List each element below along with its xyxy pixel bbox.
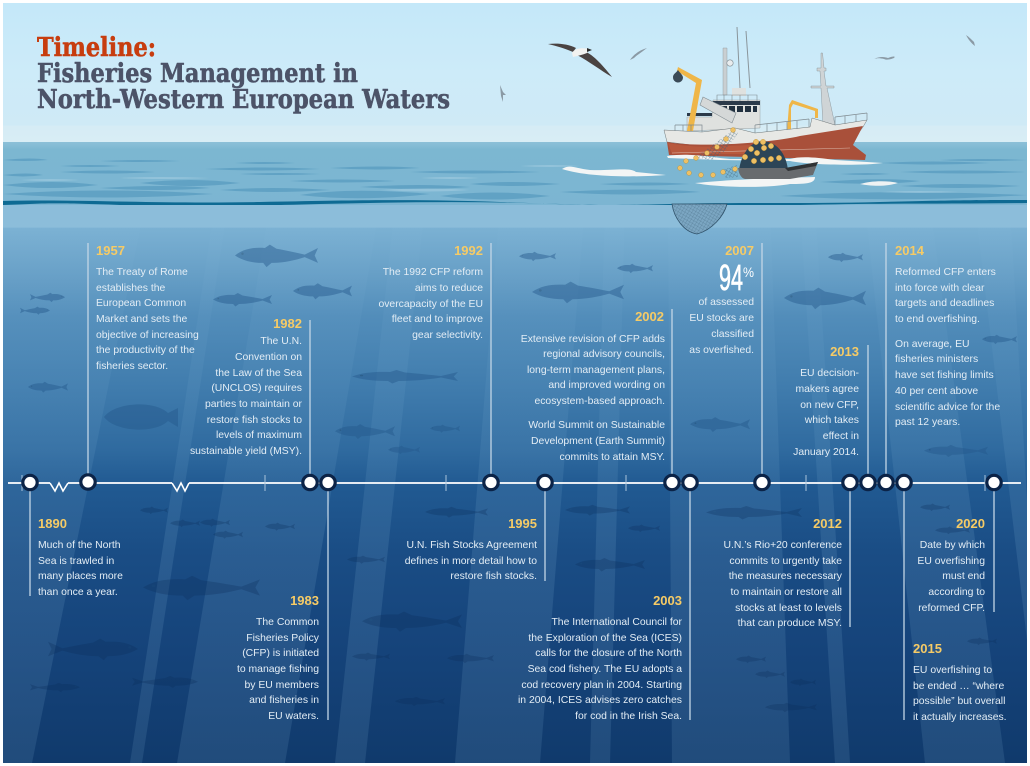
event 2002: World Summit on Sustainable [528, 420, 665, 431]
event 2003: calls for the closure of the North [535, 648, 682, 659]
event 2003: for cod in the Irish Sea. [575, 711, 682, 722]
event 2012: that can produce MSY. [738, 618, 842, 629]
event 2020: 2020 [956, 516, 985, 531]
event 2020: according to [928, 587, 985, 598]
event 2007: classified [711, 329, 754, 340]
wheelhouse [687, 100, 760, 131]
title: line 2: Fisheries Management in [37, 59, 358, 89]
event 2015: be ended … “where [913, 681, 1004, 692]
timeline markers [23, 475, 1001, 490]
event 2013: January 2014. [793, 447, 859, 458]
event 2003: The International Council for [551, 617, 683, 628]
event 1992: fleet and to improve [392, 314, 483, 325]
event 1890 [30, 481, 123, 598]
event 1995: restore fish stocks. [450, 571, 537, 582]
radar dome [727, 60, 733, 66]
event 2003: cod recovery plan in 2004. Starting [521, 680, 682, 691]
event 2003: the Exploration of the Sea (ICES) [528, 633, 682, 644]
statistic 94: 94 [719, 257, 743, 298]
event 1890: 1890 [38, 516, 67, 531]
event 1995: U.N. Fish Stocks Agreement [406, 540, 537, 551]
wheelhouse windows [721, 106, 757, 112]
event 1992: 1992 [454, 243, 483, 258]
event 1957: establishes the [96, 283, 166, 294]
forward mast [723, 48, 727, 95]
event 2013: makers agree [795, 384, 859, 395]
event 2002: 2002 [635, 309, 664, 324]
title: Timeline: Timeline: [37, 33, 156, 63]
flatfish [104, 404, 178, 430]
deck railings [675, 113, 867, 133]
event 1957: 1957 [96, 243, 125, 258]
event 1983: 1983 [290, 593, 319, 608]
event 1983: and fisheries in [249, 695, 319, 706]
event 2003: 2003 [653, 593, 682, 608]
event 1982: parties to maintain or [205, 399, 303, 410]
white hull band [664, 118, 867, 146]
fishing trawler [562, 27, 898, 187]
event 1995: defines in more detail how to [405, 556, 537, 567]
event 1957: European Common [96, 298, 186, 309]
event 1890: Much of the North [38, 540, 121, 551]
timeline axis [8, 475, 1021, 491]
event 1982: the Law of the Sea [215, 368, 302, 379]
event 2014: On average, EU [895, 339, 970, 350]
event 2002: and improved wording on [548, 380, 665, 391]
event 2014 [886, 243, 1000, 481]
upper fish shoal [20, 245, 1017, 457]
event 1992: aims to reduce [415, 283, 483, 294]
event 1982: 1982 [273, 316, 302, 331]
tall antennas [737, 27, 750, 88]
light rays [3, 205, 1027, 763]
event 2007: EU stocks are [689, 313, 754, 324]
event 2020: must end [942, 571, 985, 582]
event 2012: U.N.’s Rio+20 conference [724, 540, 842, 551]
event 2002: Development (Earth Summit) [531, 436, 665, 447]
event 2007 [689, 243, 762, 481]
event 2003: in 2004, ICES advises zero catches [518, 695, 682, 706]
event 2013: 2013 [830, 344, 859, 359]
axis break marks [50, 483, 189, 491]
event 2014: past 12 years. [895, 417, 960, 428]
event 2007: as overfished. [689, 345, 754, 356]
event 2014: have set fishing limits [895, 370, 994, 381]
event 1982: sustainable yield (MSY). [190, 446, 302, 457]
event 2002: long-term management plans, [527, 365, 665, 376]
event 2020: Date by which [920, 540, 985, 551]
event 2002: commits to attain MSY. [560, 452, 665, 463]
event 1983 [237, 481, 328, 722]
event 2012 [724, 481, 850, 629]
event 1982 [190, 316, 310, 481]
event 1957: the productivity of the [96, 345, 195, 356]
underwater trawl net [672, 204, 727, 234]
event 2015: it actually increases. [913, 712, 1007, 723]
event 2015: 2015 [913, 641, 942, 656]
event 2013: on new CFP, [800, 400, 859, 411]
net bag and floats [678, 128, 818, 179]
event 1957: The Treaty of Rome [96, 267, 188, 278]
event 2015 [904, 481, 1007, 723]
event 2020: reformed CFP. [918, 603, 985, 614]
hanging weight [673, 70, 683, 83]
foam patches [562, 167, 666, 176]
event 2015: EU overfishing to [913, 665, 992, 676]
yellow crane aft [787, 100, 818, 131]
event 2014: into force with clear [895, 283, 985, 294]
event 1982: restore fish stocks to [207, 415, 302, 426]
event 2014: scientific advice for the [895, 402, 1000, 413]
event 1983: (CFP) is initiated [242, 648, 319, 659]
event 2013: EU decision- [800, 368, 859, 379]
title [37, 33, 450, 115]
statistic percent sign: % [743, 264, 754, 280]
lower fish shoal [30, 504, 997, 712]
event 1992 [378, 243, 491, 481]
event 1957 [88, 243, 199, 481]
event 2014: 40 per cent above [895, 386, 978, 397]
event 1995 [405, 481, 545, 582]
event 1890: Sea is trawled in [38, 556, 114, 567]
event 2012: commits to urgently take [729, 556, 842, 567]
small birds [500, 35, 975, 102]
red hull [667, 126, 866, 160]
event 2003 [518, 481, 690, 722]
event 2007: 2007 [725, 243, 754, 258]
railing top [717, 95, 757, 101]
event 2020: EU overfishing [917, 556, 985, 567]
event 1957: objective of increasing [96, 330, 199, 341]
grey duct [700, 97, 736, 123]
event 1983: EU waters. [268, 711, 319, 722]
event 2012: stocks at least to levels [735, 603, 842, 614]
event 2002 [521, 309, 672, 481]
event 2014: Reformed CFP enters [895, 267, 996, 278]
event 2013: which takes [804, 415, 859, 426]
event 1890: than once a year. [38, 587, 118, 598]
event 1982: The U.N. [260, 336, 302, 347]
event 1983: Fisheries Policy [246, 633, 320, 644]
yellow crane front [677, 67, 702, 131]
seagull: large albatross [548, 44, 612, 77]
event 2014: to end overfishing. [895, 314, 980, 325]
event 2012: to maintain or restore all [731, 587, 842, 598]
event 2002: Extensive revision of CFP adds [521, 334, 665, 345]
event 2003: Sea cod fishery. The EU adopts a [528, 664, 682, 675]
event 1982: levels of maximum [216, 430, 302, 441]
event 1957: Market and sets the [96, 314, 187, 325]
sea surface [3, 142, 1027, 207]
sky background [3, 3, 1027, 142]
event 1992: gear selectivity. [412, 330, 483, 341]
title: line 3: North-Western European Waters [37, 85, 450, 115]
event 1995: 1995 [508, 516, 537, 531]
event 2014: fisheries ministers [895, 354, 978, 365]
event 1982: (UNCLOS) requires [211, 383, 302, 394]
event 2007: of assessed [699, 297, 754, 308]
rear mast [811, 53, 835, 125]
foam under hull [667, 155, 883, 165]
event 2012: 2012 [813, 516, 842, 531]
event 2015: possible” but overall [913, 696, 1005, 707]
axis ticks [22, 475, 985, 491]
event 2002: ecosystem-based approach. [534, 396, 665, 407]
event 1983: to manage fishing [237, 664, 319, 675]
event 1983: The Common [256, 617, 319, 628]
event 1992: The 1992 CFP reform [383, 267, 483, 278]
underwater background [3, 205, 1027, 763]
event 2020 [917, 481, 994, 614]
event 2002: regional advisory councils, [543, 349, 665, 360]
event 1983: by EU members [244, 680, 319, 691]
event 2013 [793, 344, 868, 481]
event 2014: 2014 [895, 243, 925, 258]
net mesh [672, 204, 727, 234]
event 2013: effect in [823, 431, 859, 442]
event 1992: overcapacity of the EU [378, 299, 483, 310]
event 2012: the measures necessary [729, 571, 843, 582]
event 1890: many places more [38, 571, 123, 582]
event 1957: fisheries sector. [96, 361, 168, 372]
event 2014: targets and deadlines [895, 298, 994, 309]
event 1982: Convention on [235, 352, 302, 363]
